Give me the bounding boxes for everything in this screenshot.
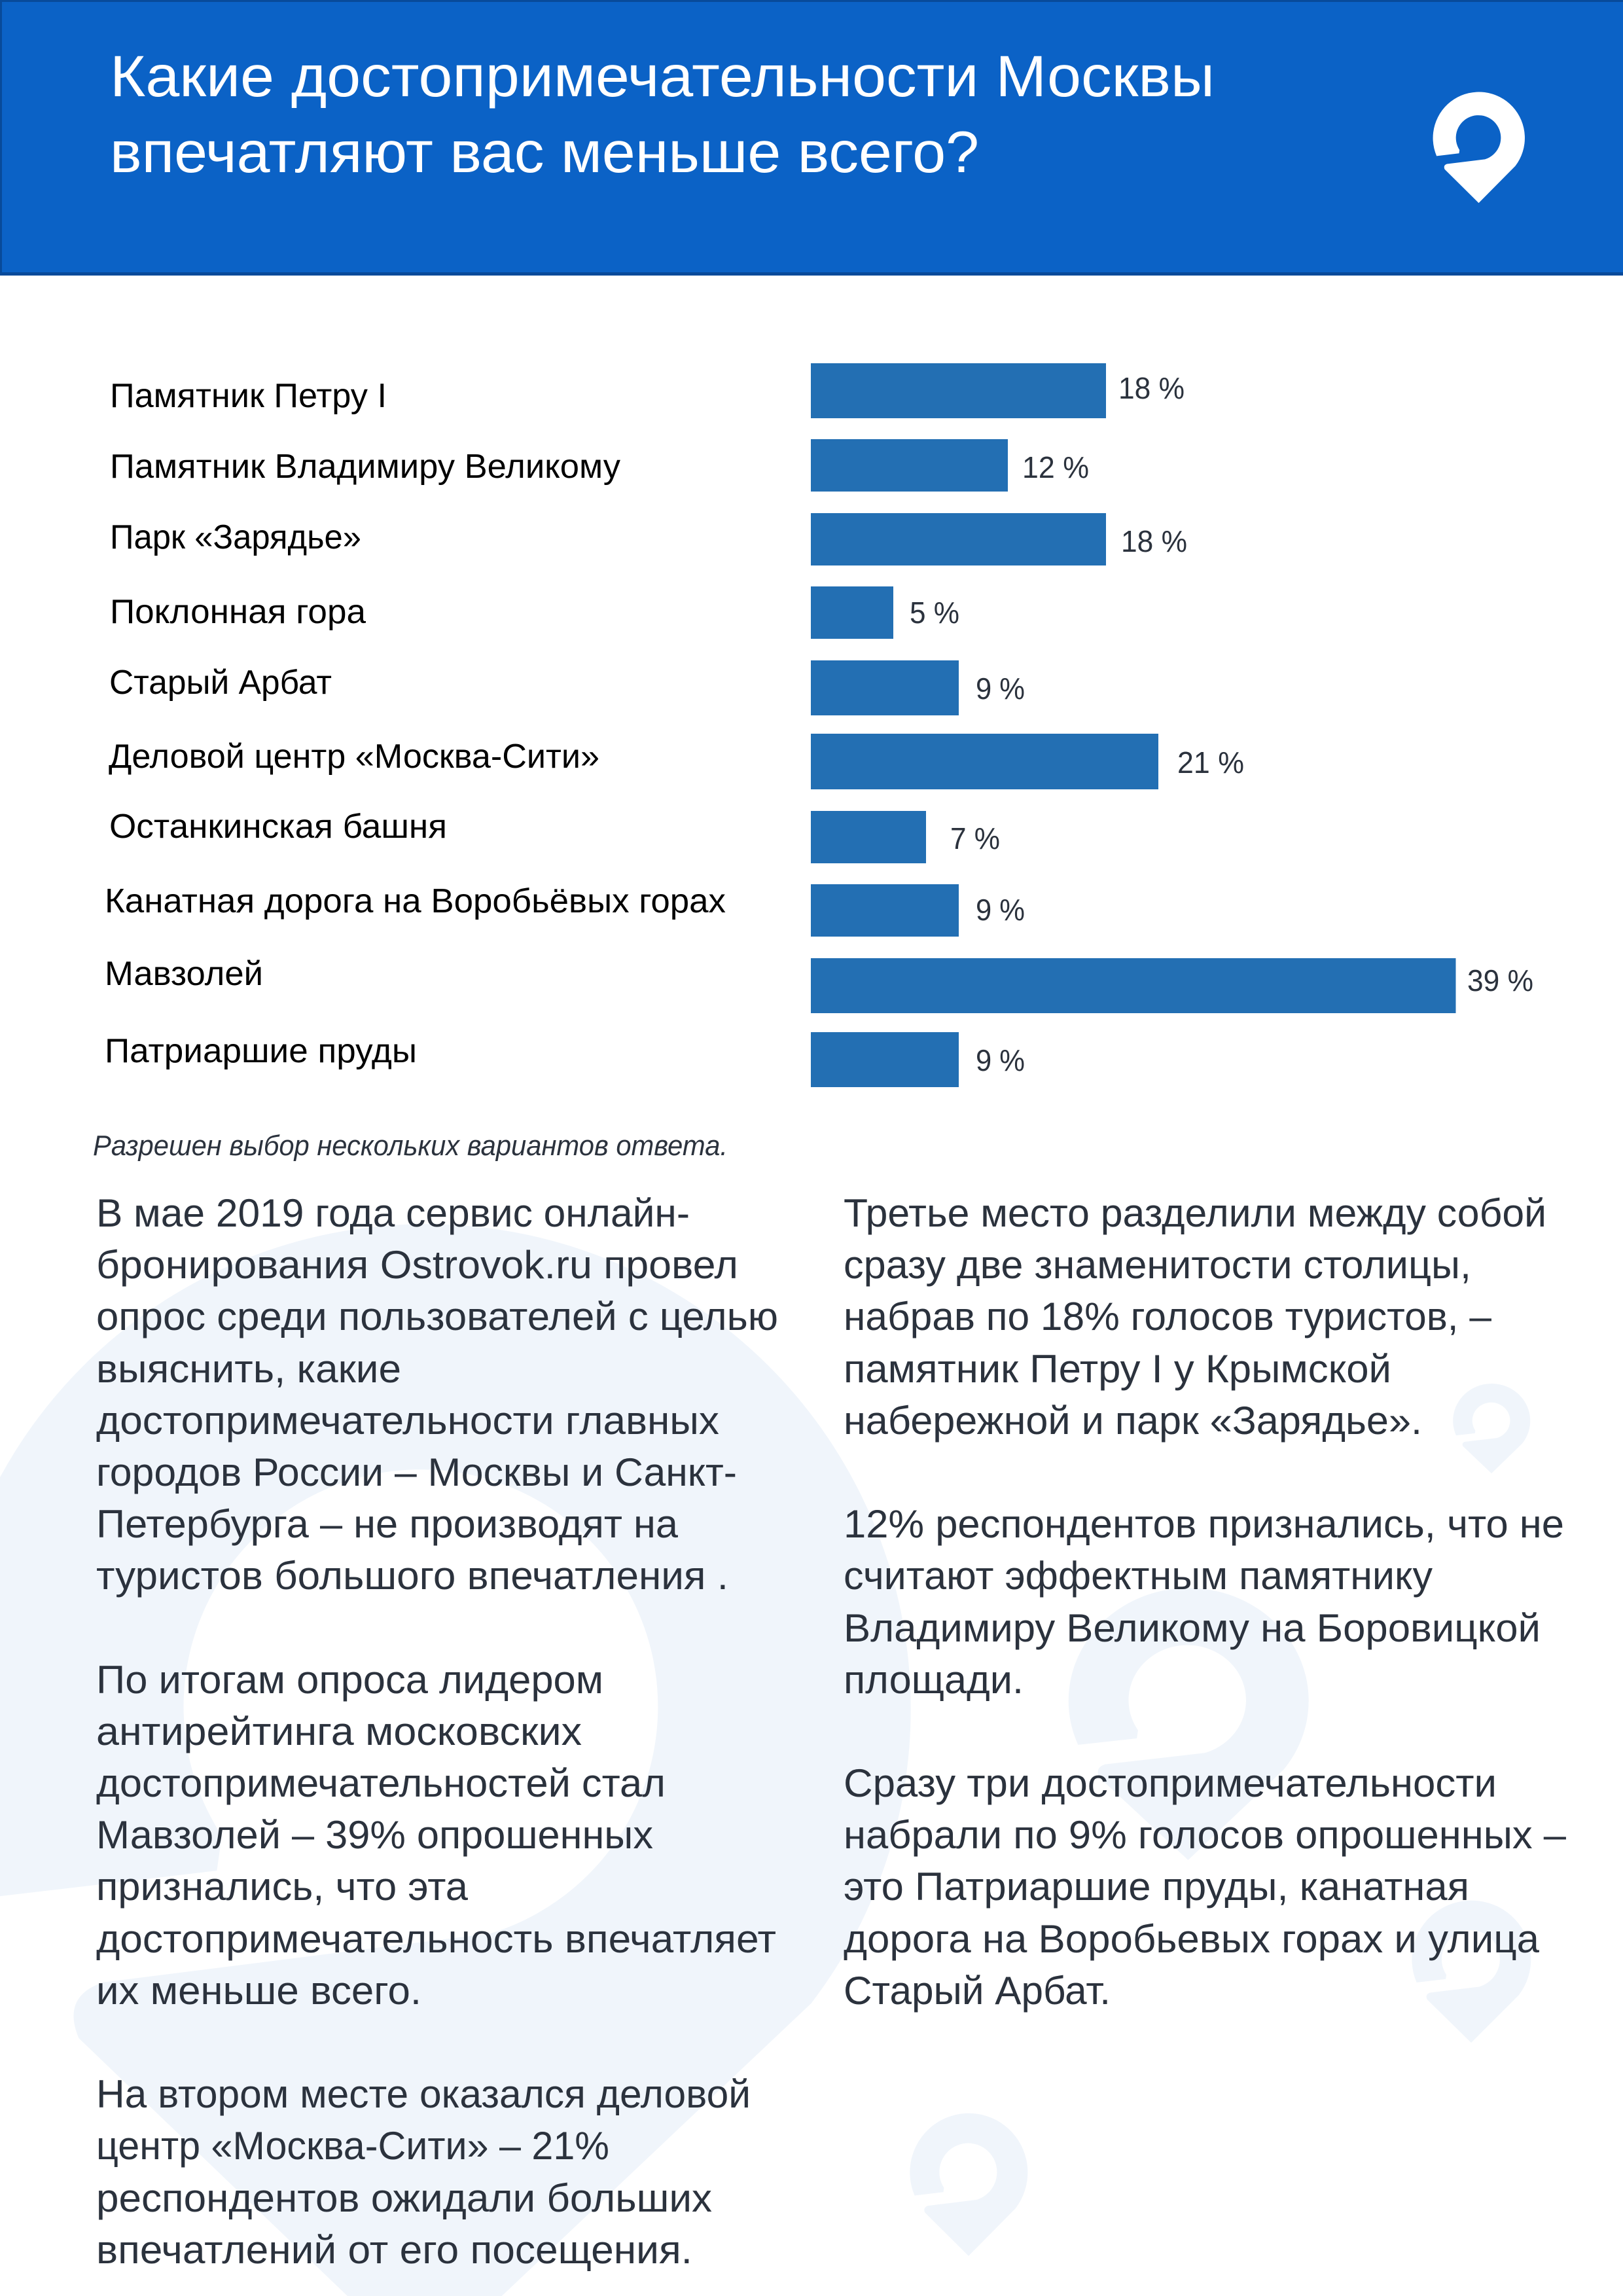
paragraph: third place: набрав по 18% голосов туристов, –	[844, 1295, 1492, 1338]
paragraph: Mausoleum leader: По итогам опроса лидером	[96, 1658, 603, 1702]
row: Поклонная гора: Поклонная гора	[110, 593, 366, 631]
paragraph: second place: На втором месте оказался деловой	[96, 2072, 751, 2116]
text column: right	[844, 1191, 1567, 2013]
paragraph: survey intro: городов России – Москвы и Санкт-	[96, 1450, 737, 1494]
watermark: medium pin	[1069, 1588, 1309, 1860]
row: Старый Арбат	[109, 660, 1025, 715]
paragraph: survey intro: опрос среди пользователей с целью	[96, 1295, 778, 1338]
paragraph: Vladimir monument	[844, 1502, 1564, 1702]
paragraph: survey intro: Петербурга – не производят на	[96, 1502, 679, 1546]
watermark: pin lower right	[1412, 1901, 1531, 2043]
row: Патриаршие пруды	[105, 1032, 1025, 1087]
paragraph: third place: сразу две знаменитости столицы,	[844, 1243, 1471, 1287]
paragraph: third place: Третье место разделили между собой	[844, 1191, 1546, 1235]
paragraph: third place: памятник Петру I у Крымской	[844, 1347, 1391, 1391]
background watermark pins	[0, 1224, 1531, 2296]
row: Парк «Зарядье»: Парк «Зарядье»	[110, 518, 361, 556]
paragraph: Mausoleum leader: достопримечательностей стал	[96, 1761, 666, 1805]
watermark: pin bottom centre	[910, 2113, 1027, 2256]
paragraph: survey intro: бронирования Ostrovok.ru провел	[96, 1243, 738, 1287]
paragraph: three landmarks: набрали по 9% голосов опрошенных –	[844, 1813, 1567, 1857]
paragraph: three landmarks: дорога на Воробьевых горах и улица	[844, 1917, 1540, 1961]
text column: left	[96, 1191, 778, 2272]
paragraph: survey intro	[96, 1191, 778, 1598]
paragraph: Vladimir monument: Владимиру Великому на Боровицкой	[844, 1606, 1541, 1650]
paragraph: third place	[844, 1191, 1546, 1443]
row: Памятник Владимиру Великому	[110, 439, 1089, 492]
row: Поклонная гора: 5 %	[910, 596, 959, 630]
row: Канатная дорога на Воробьёвых горах: 9 %	[976, 893, 1025, 927]
paragraph: Mausoleum leader: их меньше всего.	[96, 1969, 421, 2013]
paragraph: survey intro: В мае 2019 года сервис онлайн-	[96, 1191, 690, 1235]
paragraph: Vladimir monument: 12% респондентов признались, что не	[844, 1502, 1564, 1546]
header band	[0, 0, 1623, 276]
paragraph: survey intro: достопримечательности главных	[96, 1399, 719, 1443]
bar chart	[105, 363, 1533, 1087]
row: Парк «Зарядье»	[110, 513, 1187, 565]
row: Останкинская башня	[109, 808, 1000, 863]
paragraph: three landmarks: Сразу три достопримечательности	[844, 1761, 1497, 1805]
row: Останкинская башня: 7 %	[950, 821, 1000, 855]
row: Канатная дорога на Воробьёвых горах	[105, 882, 1025, 937]
paragraph: Mausoleum leader: признались, что эта	[96, 1865, 469, 1909]
row: Старый Арбат: 9 %	[976, 672, 1025, 706]
row: Деловой центр «Москва-Сити»: Деловой центр «Москва-Сити»	[109, 738, 599, 776]
chart footnote: Разрешен выбор нескольких вариантов ответа.	[93, 1130, 728, 1162]
title: Какие достопримечательности Москвы	[110, 43, 1215, 109]
row: Памятник Владимиру Великому: 12 %	[1022, 450, 1089, 484]
row: Парк «Зарядье»: 18 %	[1121, 524, 1187, 558]
row: Мавзолей: 39 %	[1467, 963, 1533, 997]
paragraph: Mausoleum leader: достопримечательность впечатляет	[96, 1917, 776, 1961]
paragraph: second place: центр «Москва-Сити» – 21%	[96, 2124, 609, 2168]
paragraph: Mausoleum leader: Мавзолей – 39% опрошенных	[96, 1813, 653, 1857]
row: Памятник Петру I: 18 %	[1118, 371, 1185, 405]
row: Памятник Петру I	[110, 363, 1185, 418]
title	[110, 43, 1215, 185]
watermark: pin top right	[1453, 1384, 1530, 1473]
row: Патриаршие пруды: 9 %	[976, 1043, 1025, 1077]
paragraph: Vladimir monument: считают эффектным памятнику	[844, 1554, 1433, 1598]
row: Памятник Владимиру Великому: Памятник Владимиру Великому	[110, 448, 620, 486]
row: Деловой центр «Москва-Сити»: 21 %	[1177, 745, 1244, 780]
row: Старый Арбат: Старый Арбат	[109, 664, 332, 702]
paragraph: Vladimir monument: площади.	[844, 1658, 1024, 1702]
row: Останкинская башня: Останкинская башня	[109, 808, 447, 846]
row: Памятник Петру I: Памятник Петру I	[110, 377, 387, 415]
paragraph: three landmarks: Старый Арбат.	[844, 1969, 1111, 2013]
row: Мавзолей: Мавзолей	[105, 955, 263, 993]
paragraph: second place	[96, 2072, 751, 2272]
paragraph: third place: набережной и парк «Зарядье».	[844, 1399, 1422, 1443]
row: Патриаршие пруды: Патриаршие пруды	[105, 1032, 417, 1070]
paragraph: three landmarks: это Патриаршие пруды, канатная	[844, 1865, 1469, 1909]
row: Поклонная гора	[110, 586, 959, 639]
row: Деловой центр «Москва-Сити»	[109, 734, 1244, 789]
paragraph: second place: респондентов ожидали больших	[96, 2176, 712, 2220]
paragraph: Mausoleum leader: антирейтинга московских	[96, 1710, 582, 1753]
paragraph: three landmarks	[844, 1761, 1567, 2013]
paragraph: survey intro: выяснить, какие	[96, 1347, 401, 1391]
watermark: large pin	[0, 1224, 911, 2296]
title: впечатляют вас меньше всего?	[110, 119, 979, 185]
paragraph: survey intro: туристов большого впечатления .	[96, 1554, 728, 1598]
paragraph: second place: впечатлений от его посещения.	[96, 2228, 692, 2272]
row: Канатная дорога на Воробьёвых горах: Канатная дорога на Воробьёвых горах	[105, 882, 726, 920]
paragraph: Mausoleum leader	[96, 1658, 776, 2013]
icon: location pin logo	[1433, 92, 1525, 203]
row: Мавзолей	[105, 955, 1533, 1013]
